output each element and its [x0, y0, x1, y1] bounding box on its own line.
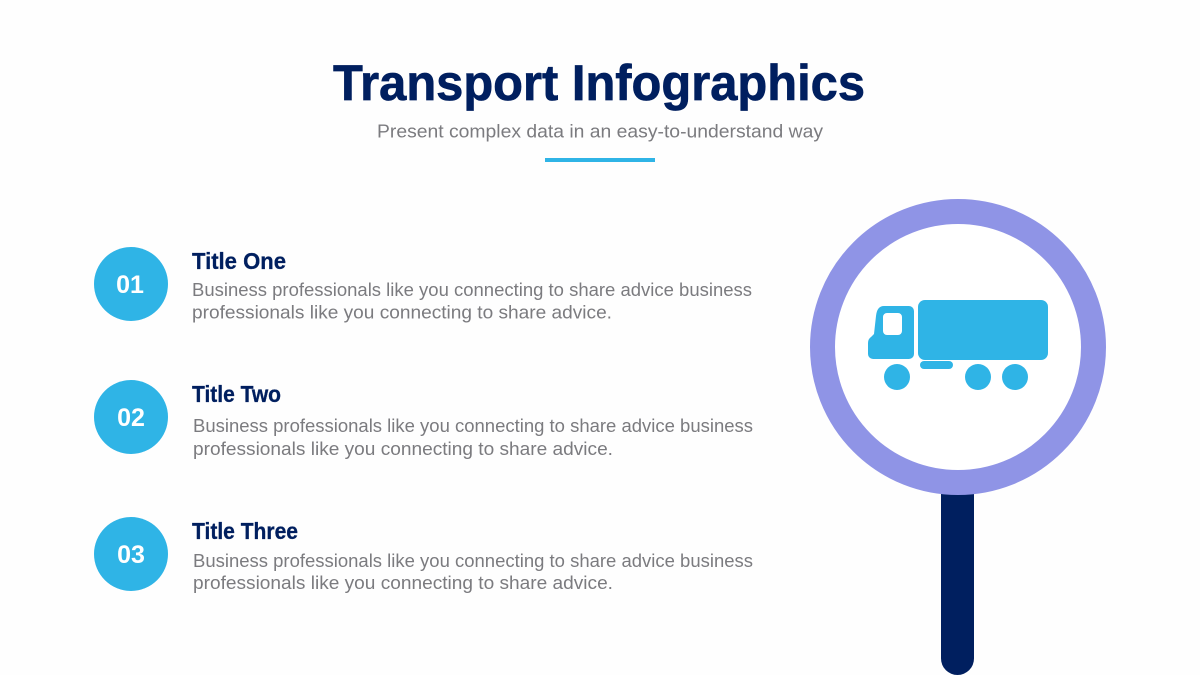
- subtitle: Present complex data in an easy-to-understand way: [377, 120, 824, 142]
- item 1: [94, 247, 752, 322]
- heading: Title Two: Title Two: [192, 381, 281, 407]
- description 2: professionals like you connecting to share advice.: [193, 438, 613, 459]
- description 1: Business professionals like you connecting to share advice business: [192, 279, 752, 300]
- description 3: [193, 550, 753, 593]
- handle: [941, 485, 974, 675]
- number badge 02: 02: [117, 404, 145, 432]
- magnifying glass: [822, 212, 1094, 675]
- truck cargo box: [918, 300, 1048, 360]
- heading: Title Three: Title Three: [192, 518, 298, 544]
- number badge 01: 01: [116, 271, 144, 299]
- description 2: Business professionals like you connecting to share advice business: [193, 415, 753, 436]
- description 3: professionals like you connecting to share advice.: [193, 572, 613, 593]
- description 3: Business professionals like you connecting to share advice business: [193, 550, 753, 571]
- description 2: [193, 415, 753, 459]
- number badge 03: 03: [117, 541, 145, 569]
- lens ring: [822, 212, 1094, 482]
- title underline accent: [545, 158, 655, 162]
- description 1: [192, 279, 752, 322]
- title: Transport Infographics: [333, 54, 865, 111]
- icon: truck: [868, 300, 1048, 390]
- number badge 01: [94, 247, 168, 321]
- item 3: [94, 517, 753, 593]
- number badge 03: [94, 517, 168, 591]
- item 2: [94, 380, 753, 459]
- description 1: professionals like you connecting to share advice.: [192, 302, 612, 322]
- truck wheels: [884, 364, 1028, 390]
- truck cab: [868, 306, 914, 359]
- truck step bar: [920, 361, 953, 369]
- number badge 02: [94, 380, 168, 454]
- heading: Title One: Title One: [192, 248, 286, 274]
